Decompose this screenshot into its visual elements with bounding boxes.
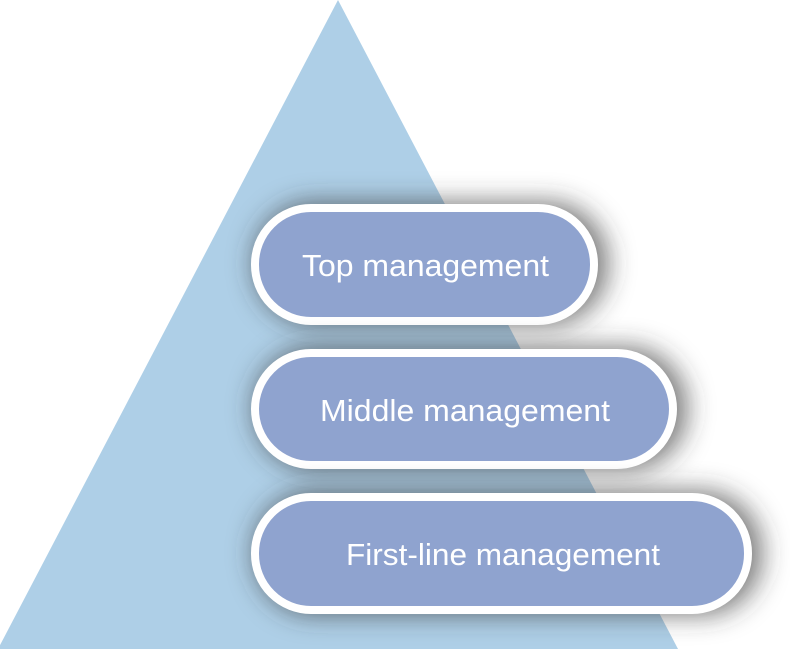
pill: top management: [254, 202, 608, 325]
pill: first-line management: [254, 491, 762, 615]
label: middle management: Middle management: [320, 393, 610, 428]
label: first-line management: First-line management: [346, 537, 660, 572]
label: top management: Top management: [302, 248, 549, 283]
pill: middle management: [254, 347, 687, 470]
